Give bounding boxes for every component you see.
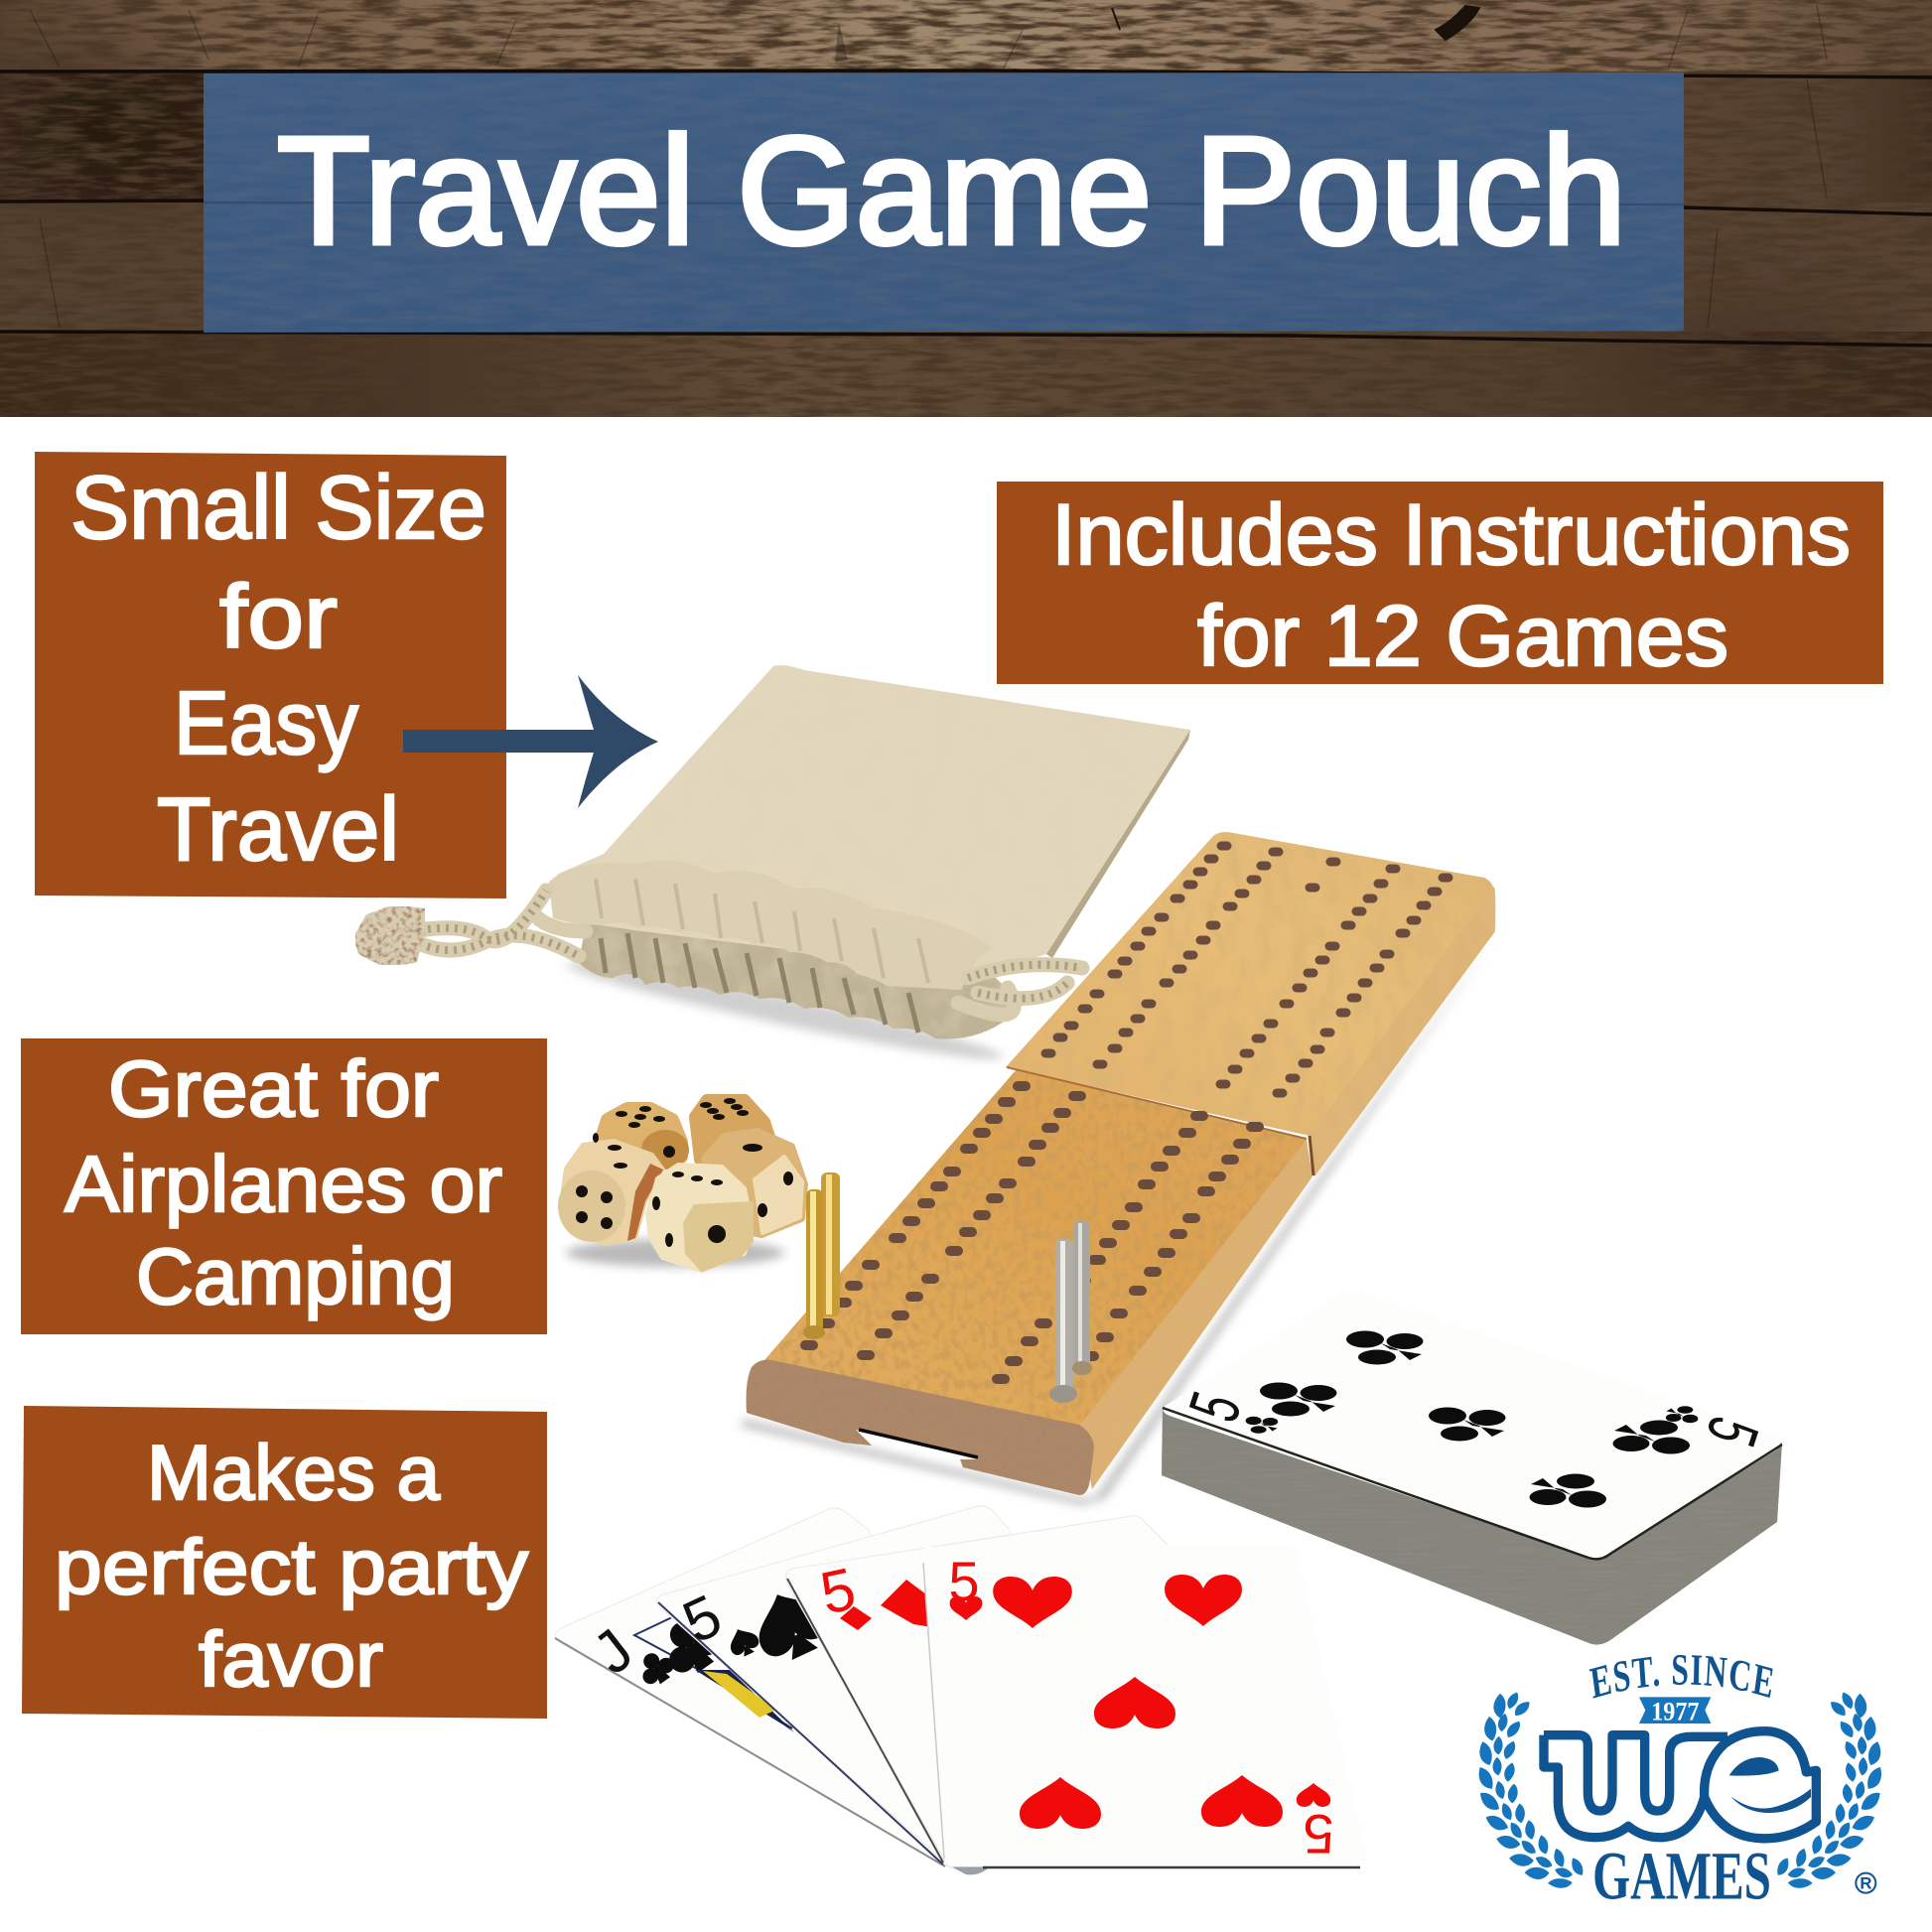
die left bbox=[558, 1141, 663, 1244]
panel: title banner bbox=[204, 72, 1684, 333]
panel: party favor bbox=[22, 1406, 547, 1719]
pouch shadow bbox=[563, 951, 1006, 1070]
illustration: card deck bbox=[1162, 1291, 1782, 1645]
panel: party favor: Makes a bbox=[147, 1429, 441, 1516]
panel: party favor: perfect party bbox=[55, 1523, 528, 1610]
logo registered mark: R bbox=[1860, 1874, 1871, 1893]
pouch gathered band bbox=[549, 861, 993, 990]
die right bbox=[705, 1132, 804, 1234]
illustration: cribbage board bbox=[740, 832, 1497, 1505]
panel: small size bbox=[35, 452, 506, 898]
card: five of hearts: 5 bbox=[1303, 1803, 1334, 1865]
panel: great for airplanes: Camping bbox=[136, 1232, 455, 1320]
deck clubs bbox=[1246, 1330, 1698, 1507]
pouch body bbox=[549, 665, 1190, 978]
logo: WE Games bbox=[1479, 1654, 1881, 1914]
dice pips bbox=[576, 1098, 793, 1247]
panel: great for airplanes: Great for bbox=[108, 1044, 439, 1133]
logo games: GAMES bbox=[1592, 1839, 1771, 1914]
illustration: dice bbox=[558, 1098, 804, 1271]
deck top bbox=[1163, 1291, 1780, 1559]
panel: includes instructions: for 12 Games bbox=[1197, 589, 1728, 684]
peg holes lower bbox=[805, 1086, 1259, 1379]
wood plank header background bbox=[0, 0, 1932, 420]
upper board section bbox=[1006, 832, 1495, 1176]
pouch cords and knot bbox=[419, 891, 1082, 1015]
logo WE mark bbox=[1544, 1731, 1816, 1839]
title: Travel Game Pouch bbox=[277, 105, 1626, 276]
illustration: pouch bbox=[355, 665, 1190, 1070]
card: five of hearts bbox=[923, 1544, 1366, 1867]
logo laurel right bbox=[1775, 1690, 1885, 1888]
pouch back ruffle bbox=[579, 918, 1013, 1039]
panel: small size: Small Size bbox=[70, 459, 486, 558]
deck numerals: 5 bbox=[1174, 1384, 1257, 1431]
card: five of diamonds bbox=[785, 1516, 1167, 1866]
panel: includes instructions: Includes Instructions bbox=[1051, 487, 1851, 583]
logo 1977 ribbon: 1977 bbox=[1651, 1697, 1700, 1725]
logo laurel left bbox=[1475, 1690, 1586, 1888]
pouch knot bbox=[355, 906, 425, 965]
arrow bbox=[403, 675, 658, 808]
icon: gold pegs bbox=[803, 1173, 840, 1339]
panel: small size: Easy bbox=[174, 674, 358, 773]
lower board section bbox=[752, 1069, 1307, 1430]
card: five of diamonds: 5 bbox=[815, 1555, 861, 1627]
logo: WE Games: EST. SINCE bbox=[1588, 1654, 1773, 1699]
card: jack of clubs bbox=[555, 1508, 953, 1868]
card: five of spades bbox=[657, 1506, 1033, 1866]
logo est since bbox=[1311, 1685, 1588, 1701]
illustration: card fan bbox=[555, 1506, 1366, 1874]
die back left bbox=[601, 1109, 689, 1170]
panel: great for airplanes bbox=[21, 1038, 547, 1334]
card: jack of clubs: J bbox=[581, 1616, 645, 1687]
panel: party favor: favor bbox=[199, 1615, 383, 1703]
pile shadow bbox=[943, 1863, 1360, 1874]
peg holes upper bbox=[1045, 846, 1449, 1093]
deck edge bbox=[1162, 1407, 1782, 1645]
panel: small size: for bbox=[219, 568, 338, 667]
card: five of hearts: 5 bbox=[948, 1550, 980, 1612]
card: five of spades: 5 bbox=[673, 1582, 731, 1656]
panel: includes instructions bbox=[997, 482, 1883, 684]
die back right bbox=[695, 1100, 769, 1160]
panel: great for airplanes: Airplanes or bbox=[65, 1140, 502, 1228]
board shadow bbox=[740, 933, 1497, 1505]
logo registered mark bbox=[1856, 1873, 1875, 1893]
die front bbox=[647, 1165, 752, 1271]
icon: silver pegs bbox=[1049, 1221, 1092, 1403]
illustration: card deck: 5 bbox=[1691, 1408, 1773, 1454]
dice shadow bbox=[566, 1239, 784, 1267]
panel: small size: Travel bbox=[157, 780, 399, 880]
